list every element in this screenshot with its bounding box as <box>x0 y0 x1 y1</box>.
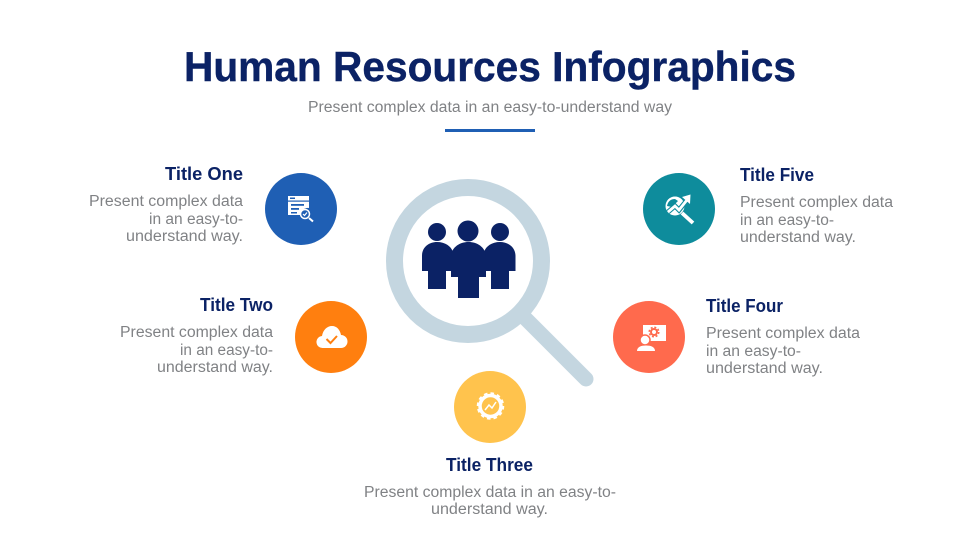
item: title four <box>613 296 864 377</box>
text: description five: Present complex data <box>740 194 893 211</box>
circle: orange <box>295 301 367 373</box>
text: description one: in an easy-to- <box>149 211 243 228</box>
heading: title five: Title Five <box>740 165 814 185</box>
text: description four: Present complex data <box>706 325 860 342</box>
text: description four: in an easy-to- <box>706 343 801 360</box>
subtitle: Present complex data in an easy-to-understand way <box>308 99 672 116</box>
circle: blue <box>265 173 337 245</box>
item: title five <box>643 165 897 246</box>
text: description four: understand way. <box>706 360 823 377</box>
icon: gear with chart line <box>478 394 503 418</box>
icon: group of people <box>422 220 516 298</box>
text: description one: understand way. <box>126 228 243 245</box>
circle: coral <box>613 301 685 373</box>
icon: cloud with check <box>316 326 348 348</box>
text: description one: Present complex data <box>89 193 243 210</box>
text: description five: in an easy-to- <box>740 212 834 229</box>
item: title two <box>120 295 367 376</box>
icon: web page with check and magnifier <box>288 196 313 222</box>
heading: title three: Title Three <box>446 455 533 475</box>
heading: title one: Title One <box>165 164 243 184</box>
heading: title two: Title Two <box>200 295 273 315</box>
title: Human Resources Infographics <box>184 43 796 90</box>
text: description three: Present complex data in an easy-to- <box>364 484 616 501</box>
text: description two: understand way. <box>157 359 273 376</box>
text: description two: Present complex data <box>120 324 273 341</box>
circle: yellow <box>454 371 526 443</box>
text: description five: understand way. <box>740 229 856 246</box>
item: title one <box>89 164 337 245</box>
icon: magnifier with growth arrow <box>666 194 693 223</box>
text: description three: understand way. <box>431 501 548 518</box>
circle: teal <box>643 173 715 245</box>
text: description two: in an easy-to- <box>180 342 273 359</box>
icon: person presenting gear on board <box>637 325 666 351</box>
heading: title four: Title Four <box>706 296 783 316</box>
item: title three <box>364 371 620 518</box>
magnifying glass <box>394 188 586 379</box>
